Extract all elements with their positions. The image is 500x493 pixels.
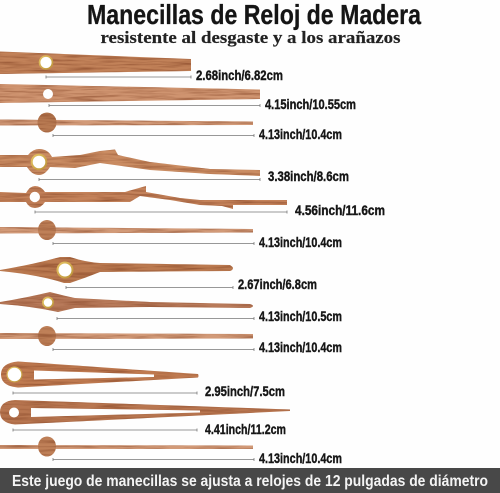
hand 10: open slot hand 2.95in: 2.95inch/7.5cm (205, 383, 285, 399)
hand 9: second hand with disc (0, 326, 342, 355)
hand 6: second hand with disc (0, 220, 342, 250)
hand 5: branch hand 4.56in: 4.56inch/11.6cm (295, 202, 385, 218)
hand 7: spade hand 2.67in (0, 257, 317, 292)
hand 11: open slot hand 4.41in: 4.41inch/11.2cm (205, 421, 286, 437)
hand 3: second hand with disc: 4.13inch/10.4cm (259, 126, 342, 142)
bottom banner (0, 468, 500, 493)
hand 7: spade hand 2.67in: 2.67inch/6.8cm (238, 276, 317, 292)
hand 11: open slot hand 4.41in (0, 400, 290, 437)
hand 2: straight wide hand 4.15in (0, 84, 356, 112)
hand 9: second hand with disc: 4.13inch/10.4cm (259, 339, 342, 355)
hand 3: second hand with disc (0, 112, 342, 142)
hand 4: branch hand 3.38in (0, 149, 349, 184)
hand 12: second hand with disc: 4.13inch/10.4cm (259, 450, 342, 466)
hand 1: straight wide hand 2.68in: 2.68inch/6.82cm (196, 67, 283, 83)
hand 8: spade hand 4.13in (0, 292, 342, 324)
hand 1: straight wide hand 2.68in (0, 52, 283, 83)
hand 2: straight wide hand 4.15in: 4.15inch/10.55cm (265, 96, 356, 112)
hand 10: open slot hand 2.95in (1, 362, 285, 399)
subtitle: resistente al desgaste y a los arañazos (100, 28, 401, 47)
hand 4: branch hand 3.38in: 3.38inch/8.6cm (268, 168, 349, 184)
hand 6: second hand with disc: 4.13inch/10.4cm (259, 234, 342, 250)
hand 12: second hand with disc (0, 436, 342, 466)
hand 5: branch hand 4.56in (0, 186, 385, 218)
hand 8: spade hand 4.13in: 4.13inch/10.5cm (259, 308, 342, 324)
